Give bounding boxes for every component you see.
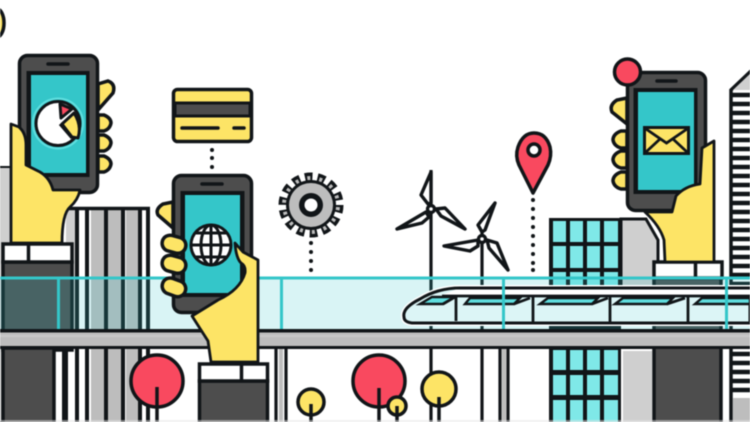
cropped yellow icon top left	[0, 9, 4, 37]
notification dot	[614, 59, 640, 85]
middle cuff and sleeve	[200, 364, 268, 422]
middle hand	[192, 243, 258, 362]
ground strip	[0, 420, 750, 422]
right hand	[645, 141, 714, 262]
middle fingers	[157, 202, 188, 299]
right fingers	[611, 98, 627, 189]
dotted connector: card to phone	[210, 148, 214, 169]
icon: map pin	[517, 133, 551, 193]
wind turbine large	[397, 172, 465, 229]
building: dark block right	[654, 262, 722, 422]
trees	[131, 355, 456, 422]
elevated road	[0, 329, 750, 349]
left phone with pie chart	[11, 56, 114, 243]
wind turbine small	[444, 203, 508, 270]
left hand	[11, 124, 80, 243]
glass posts	[57, 278, 728, 330]
building: teal windows tower	[549, 218, 621, 422]
right phone with envelope	[611, 59, 714, 262]
dotted connector: map pin	[531, 198, 535, 272]
tree yellow tiny	[388, 397, 406, 422]
tree red centre	[353, 355, 405, 422]
tree red left	[131, 355, 183, 422]
building: far left gray	[0, 167, 11, 422]
pie chart	[33, 98, 83, 148]
tree yellow right	[422, 372, 456, 422]
building: light gray beside teal tower	[621, 219, 658, 422]
envelope	[643, 126, 690, 155]
fingers	[98, 81, 114, 172]
building: dark block left	[3, 244, 72, 422]
icon: credit card	[174, 90, 252, 142]
train windows	[420, 297, 750, 304]
globe	[191, 225, 231, 265]
building: striped tower left	[64, 208, 150, 422]
glass walkway band	[0, 276, 750, 331]
building: striped skyscraper right	[731, 70, 750, 422]
high speed train	[404, 288, 750, 323]
dotted connector: gear	[309, 241, 313, 272]
middle phone with globe	[157, 176, 268, 422]
icon: gear	[283, 177, 339, 233]
thin poles under road centre	[276, 170, 508, 422]
tree yellow small	[298, 389, 324, 422]
